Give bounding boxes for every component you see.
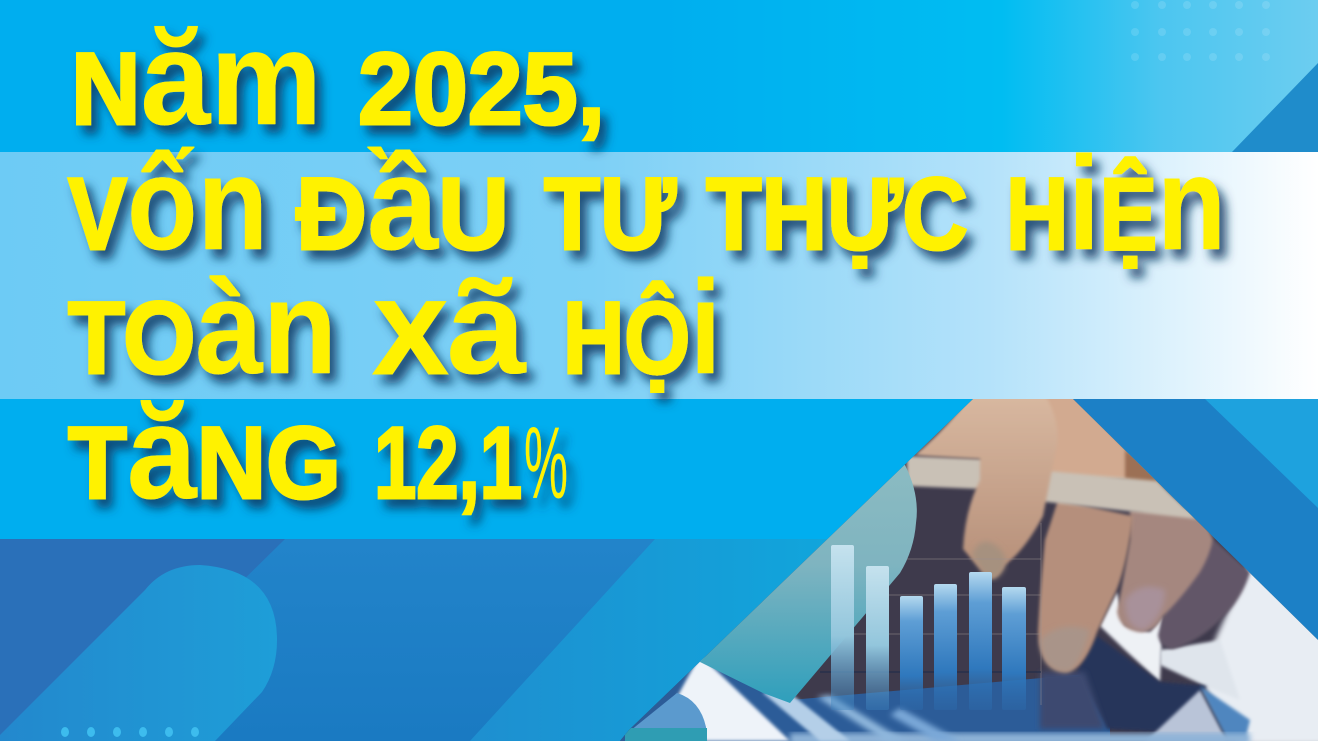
photo white between fingers [1100,592,1163,682]
photo background right white [1205,560,1318,741]
light title band [0,152,1318,399]
chart grid lines [820,523,1041,705]
middle band [0,399,1318,539]
teal overlay pill [700,464,917,703]
top band [0,0,1318,152]
bottom-left white blob [677,655,790,741]
finger 3 [1117,510,1213,632]
title line 4: 12,1 [374,406,522,520]
title line 2: Vốn [68,130,268,278]
title line 2: HiỆn [1006,130,1226,278]
finger 4 [1158,539,1250,649]
finger 1 [915,395,1058,578]
right dark-blue diagonal area [1073,399,1318,640]
title line 2: ĐầU [296,130,509,278]
bottom-left blue notch [634,693,706,728]
title: % [524,406,568,520]
finger 2 lower [1038,500,1133,672]
title line 4: TăNG [68,379,341,527]
title line 4 [68,379,568,527]
photo background [620,399,1318,741]
title [68,5,1226,527]
keyboard stripes [762,692,849,741]
top-right triangle [1232,63,1318,152]
diagonal pill shape [0,565,277,741]
title line 2: TƯ [544,157,676,271]
title line 1: 2025, [358,32,605,146]
photo: hand, pen and bar chart on tablet [610,395,1318,741]
bottom-left dots [61,727,199,737]
bar chart [831,545,1026,710]
bottom strip [790,733,1250,741]
title line 3: Xã [374,254,527,402]
title line 3: TOàn [68,254,337,402]
bottom panel [0,539,1318,741]
finger 2 upper [1044,399,1156,481]
title line 2: THỰC [706,157,968,271]
top-right dot grid [1131,1,1270,61]
title line 2 [68,130,1226,278]
title line 3: HỘi [563,254,721,402]
title line 1 [71,5,605,153]
pen [907,456,1197,519]
title line 1: Năm [71,5,322,153]
photo dark tablet [1077,636,1207,732]
title line 3 [68,254,721,402]
photo grey wedge [1151,688,1224,738]
